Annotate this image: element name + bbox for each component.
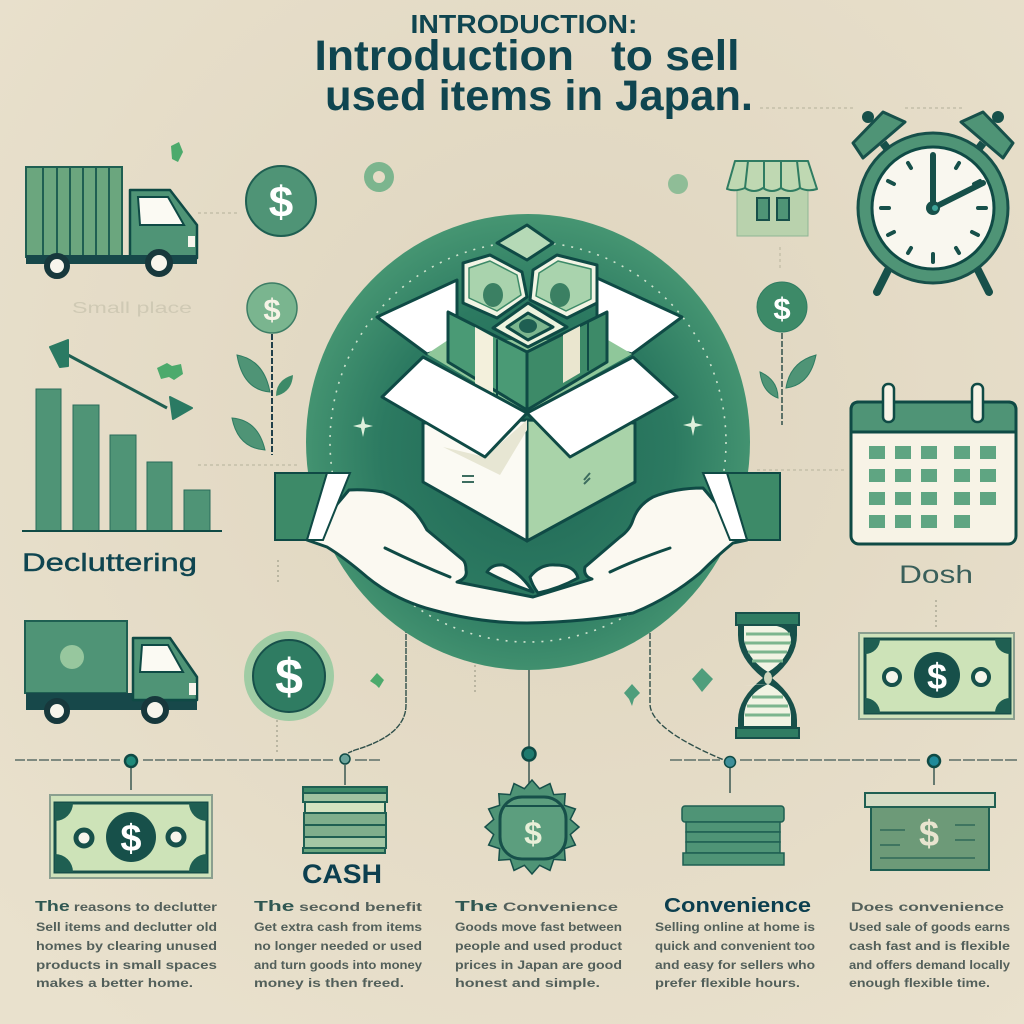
legs: [877, 270, 989, 292]
icon: hourglass: [736, 613, 799, 738]
icon: lower dollar coin: [244, 631, 334, 721]
icon: seal badge: $: [524, 815, 542, 851]
column 1 heading: The reasons to declutter: [35, 898, 218, 915]
text column 5: Used sale of goods earns: [849, 922, 1010, 934]
icon: alarm clock: [853, 111, 1013, 292]
icon: top truck: [26, 167, 197, 276]
left sleeve: [275, 473, 327, 540]
centre fingers: [487, 565, 578, 593]
right sleeve: [727, 473, 780, 540]
bells: [853, 112, 905, 158]
label: dosh: Dosh: [899, 561, 973, 589]
stack of money: [448, 225, 607, 410]
axis: [22, 530, 222, 532]
clock hands: [933, 155, 983, 208]
text column 3: people and used product: [455, 941, 622, 953]
column 5 heading: Does convenience: [851, 902, 1004, 914]
icon: cash stack: [303, 787, 387, 853]
text column 4: Selling online at home is: [655, 922, 815, 934]
text column 1: [35, 898, 218, 990]
icon: banknote bottom left: [50, 795, 212, 878]
column 3 heading: The Convenience: [455, 898, 618, 915]
calendar grid: [869, 446, 996, 528]
icon: banknote right: [859, 633, 1014, 719]
text column 4: prefer flexible hours.: [655, 978, 800, 990]
text column 5: cash fast and is flexible: [849, 941, 1010, 953]
text column 1: products in small spaces: [36, 960, 217, 972]
text column 2: money is then freed.: [254, 978, 404, 990]
icon: store: [727, 161, 817, 236]
box inside: [427, 340, 632, 413]
icon: small coin with leaves right: [757, 282, 816, 425]
box body: [423, 420, 635, 541]
title line 1: Introduction to sell: [314, 32, 740, 80]
clock ticks: [881, 163, 986, 262]
text column 1: homes by clearing unused: [36, 941, 217, 953]
text column 2: [254, 898, 423, 990]
text column 3: prices in Japan are good: [455, 960, 622, 972]
icon: small coin with leaves right: $: [773, 291, 791, 326]
bars: [36, 389, 210, 531]
text column 4: quick and convenient too: [655, 941, 815, 953]
title line 2: used items in Japan.: [325, 72, 753, 120]
note corners: [55, 803, 207, 872]
icon: dollar coin top: [246, 166, 316, 236]
text column 4: [655, 895, 815, 990]
text column 4: and easy for sellers who: [655, 960, 815, 972]
box marks: [462, 473, 590, 484]
text column 2: Get extra cash from items: [254, 922, 422, 934]
palms: [307, 488, 747, 623]
label: decluttering: Decluttering: [22, 549, 197, 577]
inner shadow on box: [443, 420, 527, 475]
note corners: [865, 639, 1010, 713]
icon: dollar coin top: $: [269, 178, 293, 227]
column 2 heading: The second benefit: [254, 898, 422, 915]
finger lines: [385, 548, 670, 577]
icon: small coin with leaves left: [232, 283, 297, 455]
icon: banknote bottom left: $: [120, 818, 142, 860]
title: [314, 9, 753, 120]
text column 2: and turn goods into money: [254, 960, 423, 972]
central illustration: box with money: [377, 225, 682, 541]
icon: lower truck: [25, 621, 197, 721]
box back flaps: [377, 278, 682, 354]
text column 3: Goods move fast between: [455, 922, 622, 934]
hands holding the box: [275, 473, 780, 623]
faint caption under top truck: Small place: [72, 300, 192, 317]
bell stems: [883, 143, 983, 152]
dotted ring: [330, 242, 726, 642]
small decorative icons: [157, 142, 713, 706]
text column 1: makes a better home.: [36, 978, 193, 990]
text column 2: no longer needed or used: [254, 941, 422, 953]
icon: seal badge: [485, 780, 579, 874]
icon: cash box: $: [919, 813, 939, 854]
icon: cash box: [865, 793, 995, 870]
text column 3: honest and simple.: [455, 978, 600, 990]
column 4 heading: Convenience: [664, 895, 811, 917]
left cuff: [307, 473, 350, 540]
sparkles: [353, 415, 703, 437]
text column 5: [849, 902, 1011, 990]
bar chart: decluttering: [22, 340, 222, 531]
connector lines: [15, 108, 1018, 793]
icon: lower dollar coin: $: [275, 649, 303, 705]
text column 5: enough flexible time.: [849, 978, 990, 990]
label: cash: CASH: [302, 859, 382, 889]
timeline nodes: [125, 748, 940, 768]
icon: banknote right: $: [927, 656, 947, 697]
text column 5: and offers demand locally: [849, 960, 1011, 972]
central green disc: [306, 214, 750, 670]
text column 1: Sell items and declutter old: [36, 922, 217, 934]
text column 3: [455, 898, 622, 990]
box front flaps: [382, 357, 677, 457]
icon: small coin with leaves left: $: [263, 292, 281, 327]
icon: calendar: [851, 384, 1016, 544]
title kicker: INTRODUCTION:: [410, 9, 638, 39]
icon: flat stack: [682, 806, 784, 865]
downward arrow: [68, 355, 167, 408]
right cuff: [703, 473, 747, 540]
